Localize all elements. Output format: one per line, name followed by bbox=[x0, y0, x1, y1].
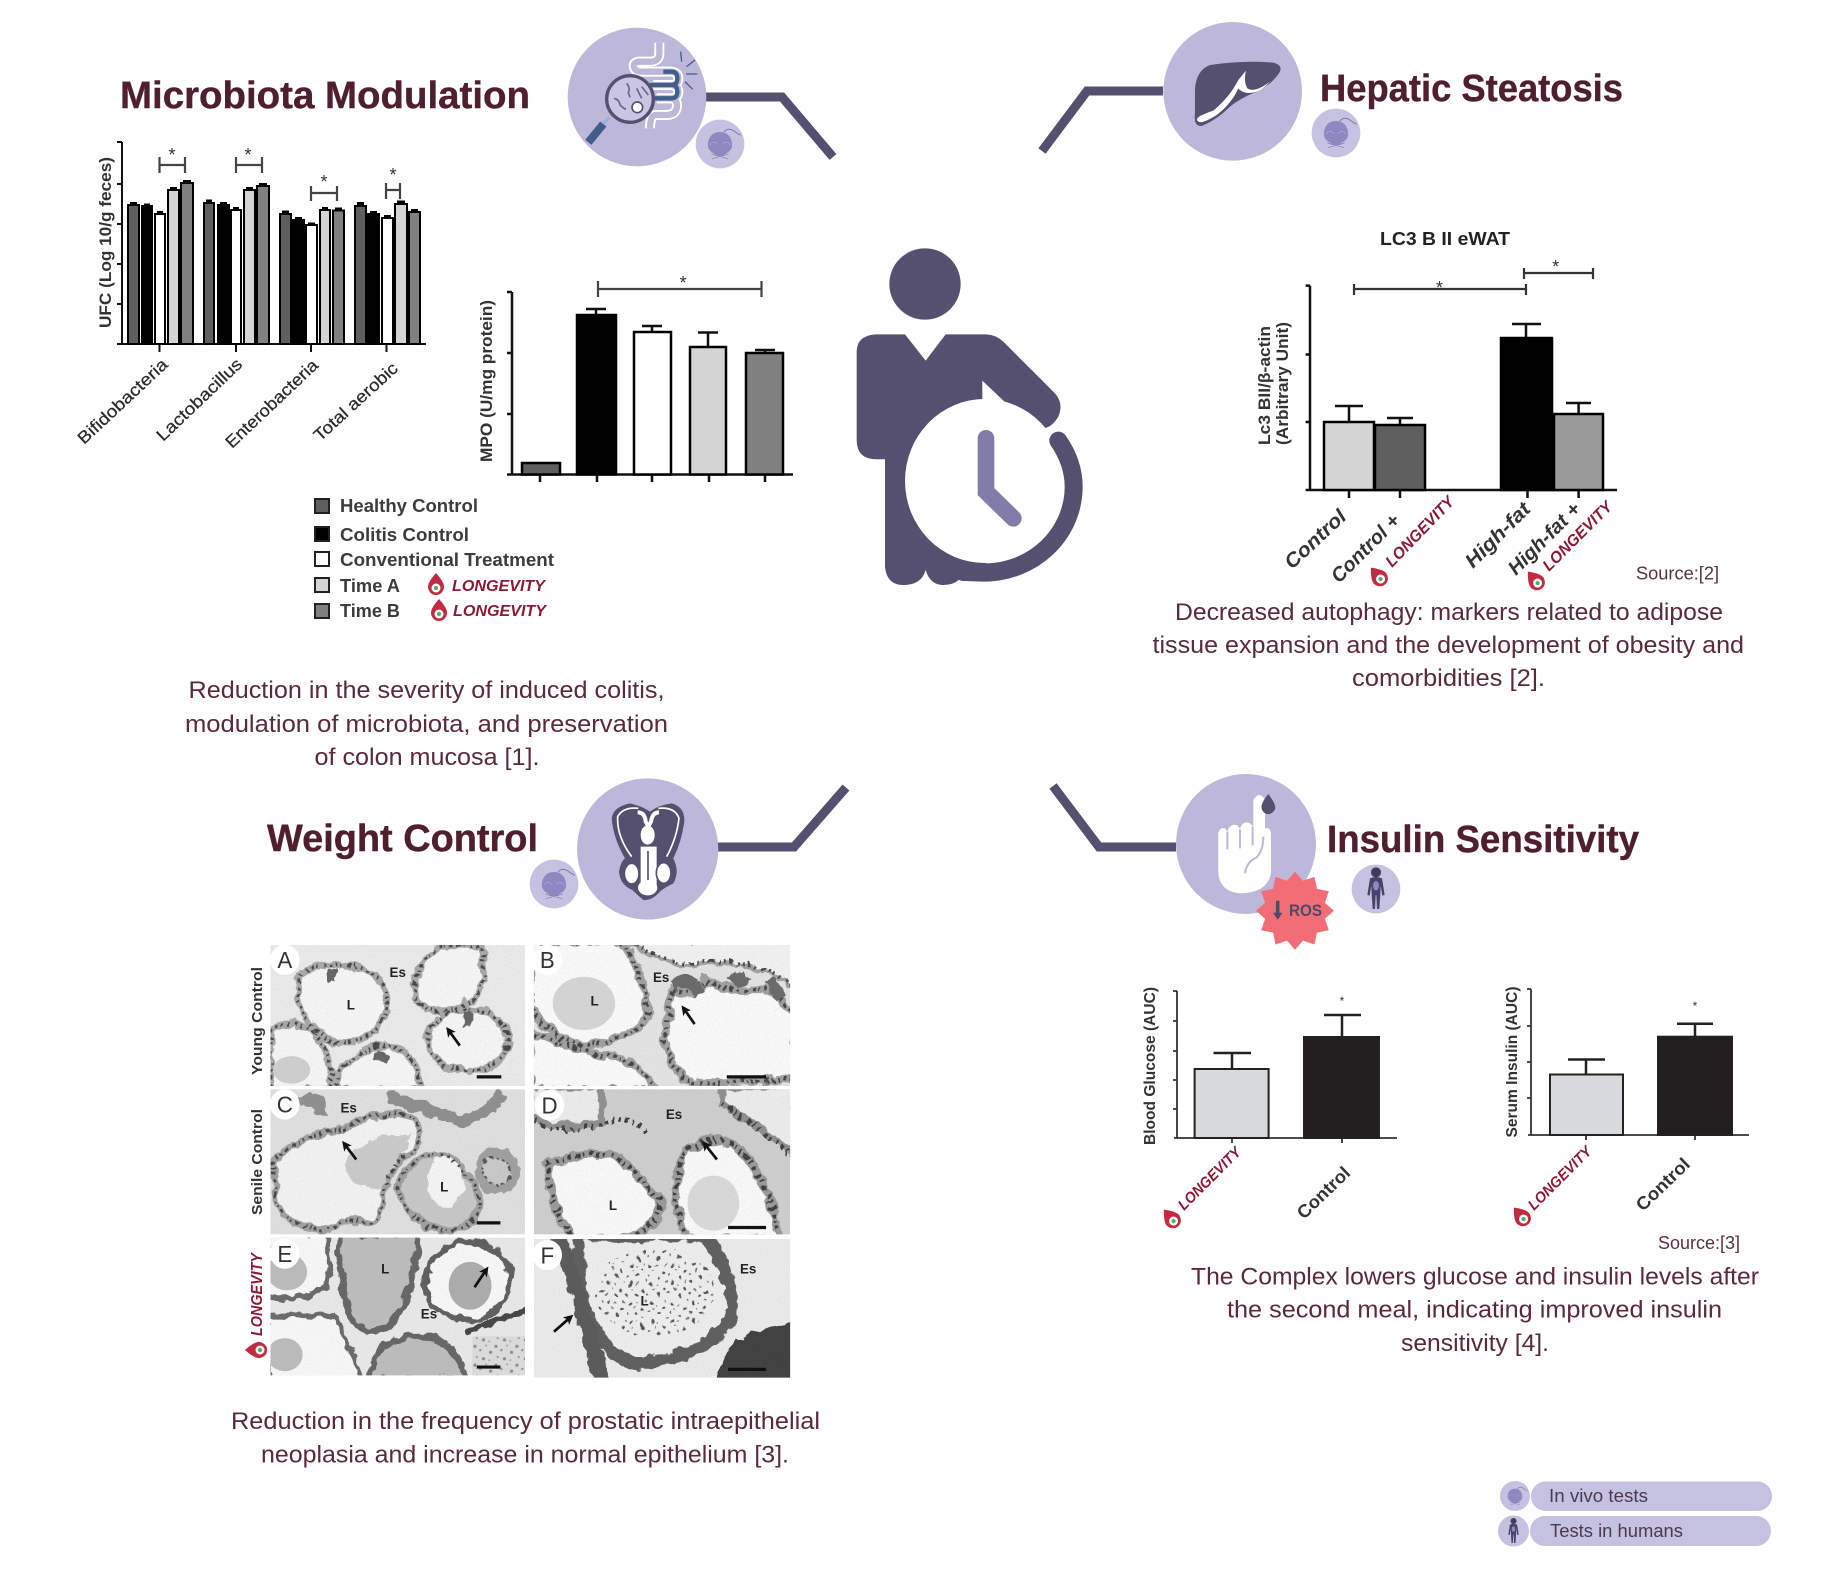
bar chart: LC3 B II eWAT: High-fat bbox=[1461, 497, 1536, 573]
bar chart: blood glucose AUC: * bbox=[1340, 994, 1345, 1008]
micrograph B bbox=[530, 941, 796, 1091]
micrograph letter badges: L bbox=[591, 994, 599, 1009]
source note: Source:[2] bbox=[1636, 564, 1719, 584]
icon: in vivo mouse badge bbox=[530, 860, 578, 908]
micrograph row labels: Young Control bbox=[249, 967, 266, 1075]
caption: colitis bbox=[185, 677, 668, 771]
caption: glucose and insulin: the second meal, indicating improved insulin bbox=[1227, 1296, 1722, 1324]
micrograph letter badges: D bbox=[541, 1093, 558, 1119]
connector line bbox=[1042, 91, 1163, 151]
micrograph letter badges: Es bbox=[740, 1261, 756, 1276]
caption: autophagy: comorbidities [2]. bbox=[1352, 665, 1545, 692]
panel: weight control bbox=[231, 778, 846, 1469]
bar chart: UFC by bacteria group: * bbox=[389, 165, 397, 185]
connector line bbox=[718, 788, 846, 847]
bar chart: MPO activity: * bbox=[679, 273, 687, 293]
legend item: in vivo tests: In vivo tests bbox=[1549, 1486, 1648, 1506]
micrograph letter badges: Es bbox=[653, 970, 669, 985]
legend: treatment groups: LONGEVITY bbox=[452, 578, 546, 595]
title: Microbiota Modulation: Microbiota Modulation bbox=[120, 75, 530, 117]
panel: microbiota modulation bbox=[74, 28, 833, 771]
panel: hepatic steatosis bbox=[1042, 22, 1744, 692]
bar chart: UFC by bacteria group bbox=[74, 142, 426, 452]
micrograph letter badges: B bbox=[540, 948, 555, 973]
legend item: in vivo tests bbox=[1500, 1481, 1772, 1511]
caption: prostatic neoplasia: Reduction in the frequency of prostatic intraepithelial bbox=[231, 1408, 820, 1435]
bar chart: LC3 B II eWAT: (Arbitrary Unit) bbox=[1274, 322, 1292, 445]
icon: prostate anatomy bbox=[577, 778, 718, 920]
micrograph letter badges: C bbox=[277, 1092, 293, 1118]
micrograph letter badges: Es bbox=[340, 1100, 357, 1116]
badge: reduced ROS bbox=[1256, 872, 1334, 950]
bar chart: LC3 B II eWAT: LC3 B II eWAT bbox=[1380, 229, 1510, 249]
bar chart: LC3 B II eWAT: LONGEVITY bbox=[1383, 493, 1459, 571]
bar chart: serum insulin AUC: LONGEVITY bbox=[1525, 1142, 1597, 1214]
legend: treatment groups: Time A bbox=[340, 576, 400, 596]
micrograph grid bbox=[267, 941, 796, 1382]
micrograph A bbox=[271, 945, 525, 1091]
bar chart: serum insulin AUC bbox=[1504, 986, 1749, 1230]
bar chart: UFC by bacteria group: Bifidobacteria bbox=[74, 355, 172, 448]
caption: glucose and insulin bbox=[1191, 1264, 1759, 1357]
micrograph letter badges: Es bbox=[390, 965, 406, 980]
bar chart: LC3 B II eWAT: Control bbox=[1280, 505, 1351, 574]
icon: in vivo mouse badge bbox=[696, 120, 744, 168]
micrograph letter badges: L bbox=[609, 1198, 617, 1213]
caption: prostatic neoplasia bbox=[231, 1408, 820, 1469]
icon: liver bbox=[1163, 22, 1302, 161]
micrograph letter badges: A bbox=[277, 948, 293, 973]
bar chart: LC3 B II eWAT: * bbox=[1552, 257, 1559, 277]
bar chart: LC3 B II eWAT: Lc3 BII/β-actin bbox=[1256, 326, 1274, 445]
micrograph row labels: LONGEVITY bbox=[249, 1252, 266, 1336]
micrograph D bbox=[530, 1086, 796, 1240]
micrograph letter badges: E bbox=[277, 1242, 292, 1267]
bar chart: blood glucose AUC: LONGEVITY bbox=[1175, 1142, 1246, 1214]
bar chart: serum insulin AUC: * bbox=[1693, 999, 1698, 1013]
legend: treatment groups: Conventional Treatment bbox=[340, 550, 554, 570]
central icon: person with clock bbox=[857, 248, 1074, 585]
caption: glucose and insulin: sensitivity [4]. bbox=[1401, 1330, 1549, 1357]
micrograph arrows and scale bars bbox=[345, 1009, 766, 1369]
icon: intestine under magnifier bbox=[568, 28, 706, 166]
title: Insulin Sensitivity: Insulin Sensitivity bbox=[1327, 819, 1639, 861]
caption: prostatic neoplasia: neoplasia and increase in normal epithelium [3]. bbox=[261, 1442, 789, 1469]
bar chart: UFC by bacteria group: Total aerobic bbox=[310, 358, 402, 445]
micrograph letter badges: L bbox=[641, 1293, 649, 1309]
micrograph letter badges: F bbox=[540, 1243, 554, 1268]
micrograph row labels: Senile Control bbox=[249, 1109, 266, 1215]
bar chart: LC3 B II eWAT: * bbox=[1436, 278, 1443, 298]
micrograph E bbox=[267, 1233, 526, 1380]
micrograph row labels bbox=[245, 967, 267, 1358]
caption: glucose and insulin: The Complex lowers glucose and insulin levels after bbox=[1191, 1264, 1759, 1290]
icon: finger prick bbox=[1176, 774, 1316, 914]
caption: autophagy bbox=[1152, 599, 1744, 692]
micrograph letter badges bbox=[270, 945, 756, 1321]
micrograph letter badges: L bbox=[381, 1261, 389, 1276]
connector line bbox=[1053, 786, 1176, 847]
title: Hepatic Steatosis: Hepatic Steatosis bbox=[1320, 68, 1623, 110]
legend: treatment groups: Time B bbox=[340, 601, 400, 621]
icon: human test badge bbox=[1352, 865, 1400, 913]
bar chart: blood glucose AUC: Control bbox=[1293, 1163, 1354, 1223]
bar chart: LC3 B II eWAT: High-fat + bbox=[1504, 498, 1586, 580]
legend: treatment groups: Healthy Control bbox=[340, 496, 478, 516]
bar chart: blood glucose AUC: Blood Glucose (AUC) bbox=[1142, 987, 1159, 1145]
bar chart: LC3 B II eWAT bbox=[1256, 229, 1617, 594]
micrograph letter badges: L bbox=[440, 1179, 448, 1195]
legend: treatment groups: Colitis Control bbox=[340, 525, 469, 545]
bar chart: UFC by bacteria group: UFC (Log 10/g feces) bbox=[96, 157, 115, 328]
bar chart: serum insulin AUC: Serum Insulin (AUC) bbox=[1504, 986, 1521, 1138]
legend: treatment groups bbox=[315, 496, 554, 621]
micrograph C bbox=[271, 1089, 525, 1234]
bar chart: UFC by bacteria group: Enterobacteria bbox=[222, 355, 322, 452]
connector line bbox=[706, 97, 833, 157]
badge: reduced ROS: ROS bbox=[1289, 901, 1322, 920]
bar chart: serum insulin AUC: Control bbox=[1632, 1154, 1694, 1215]
caption: colitis: modulation of microbiota, and preservation bbox=[185, 711, 668, 738]
micrograph letter badges: Es bbox=[421, 1306, 437, 1321]
caption: colitis: Reduction in the severity of induced colitis, bbox=[188, 677, 664, 704]
bar chart: blood glucose AUC bbox=[1142, 987, 1397, 1232]
legend item: tests in humans bbox=[1498, 1516, 1771, 1546]
caption: colitis: of colon mucosa [1]. bbox=[314, 744, 540, 771]
legend: test types bbox=[1498, 1481, 1772, 1546]
bar chart: MPO activity: MPO (U/mg protein) bbox=[477, 300, 496, 462]
bar chart: UFC by bacteria group: * bbox=[168, 145, 176, 165]
bar chart: LC3 B II eWAT: LONGEVITY bbox=[1540, 498, 1617, 575]
micrograph F bbox=[534, 1235, 794, 1382]
title: Weight Control: Weight Control bbox=[267, 818, 538, 860]
legend item: tests in humans: Tests in humans bbox=[1550, 1521, 1683, 1541]
caption: autophagy: Decreased autophagy: markers related to adipose bbox=[1175, 599, 1723, 626]
bar chart: LC3 B II eWAT: Control + bbox=[1327, 510, 1405, 588]
micrograph letter badges: Es bbox=[666, 1107, 682, 1122]
bar chart: UFC by bacteria group: Lactobacillus bbox=[153, 355, 246, 445]
legend: treatment groups: LONGEVITY bbox=[453, 603, 547, 620]
bar chart: UFC by bacteria group: * bbox=[320, 172, 328, 192]
icon: in vivo mouse badge bbox=[1312, 109, 1360, 157]
micrograph letter badges: L bbox=[347, 997, 355, 1012]
bar chart: MPO activity bbox=[477, 273, 793, 482]
caption: autophagy: tissue expansion and the development of obesity and bbox=[1152, 632, 1744, 659]
panel: insulin sensitivity bbox=[1053, 774, 1759, 1357]
bar chart: UFC by bacteria group: * bbox=[244, 145, 252, 165]
source note: Source:[3] bbox=[1658, 1233, 1740, 1253]
